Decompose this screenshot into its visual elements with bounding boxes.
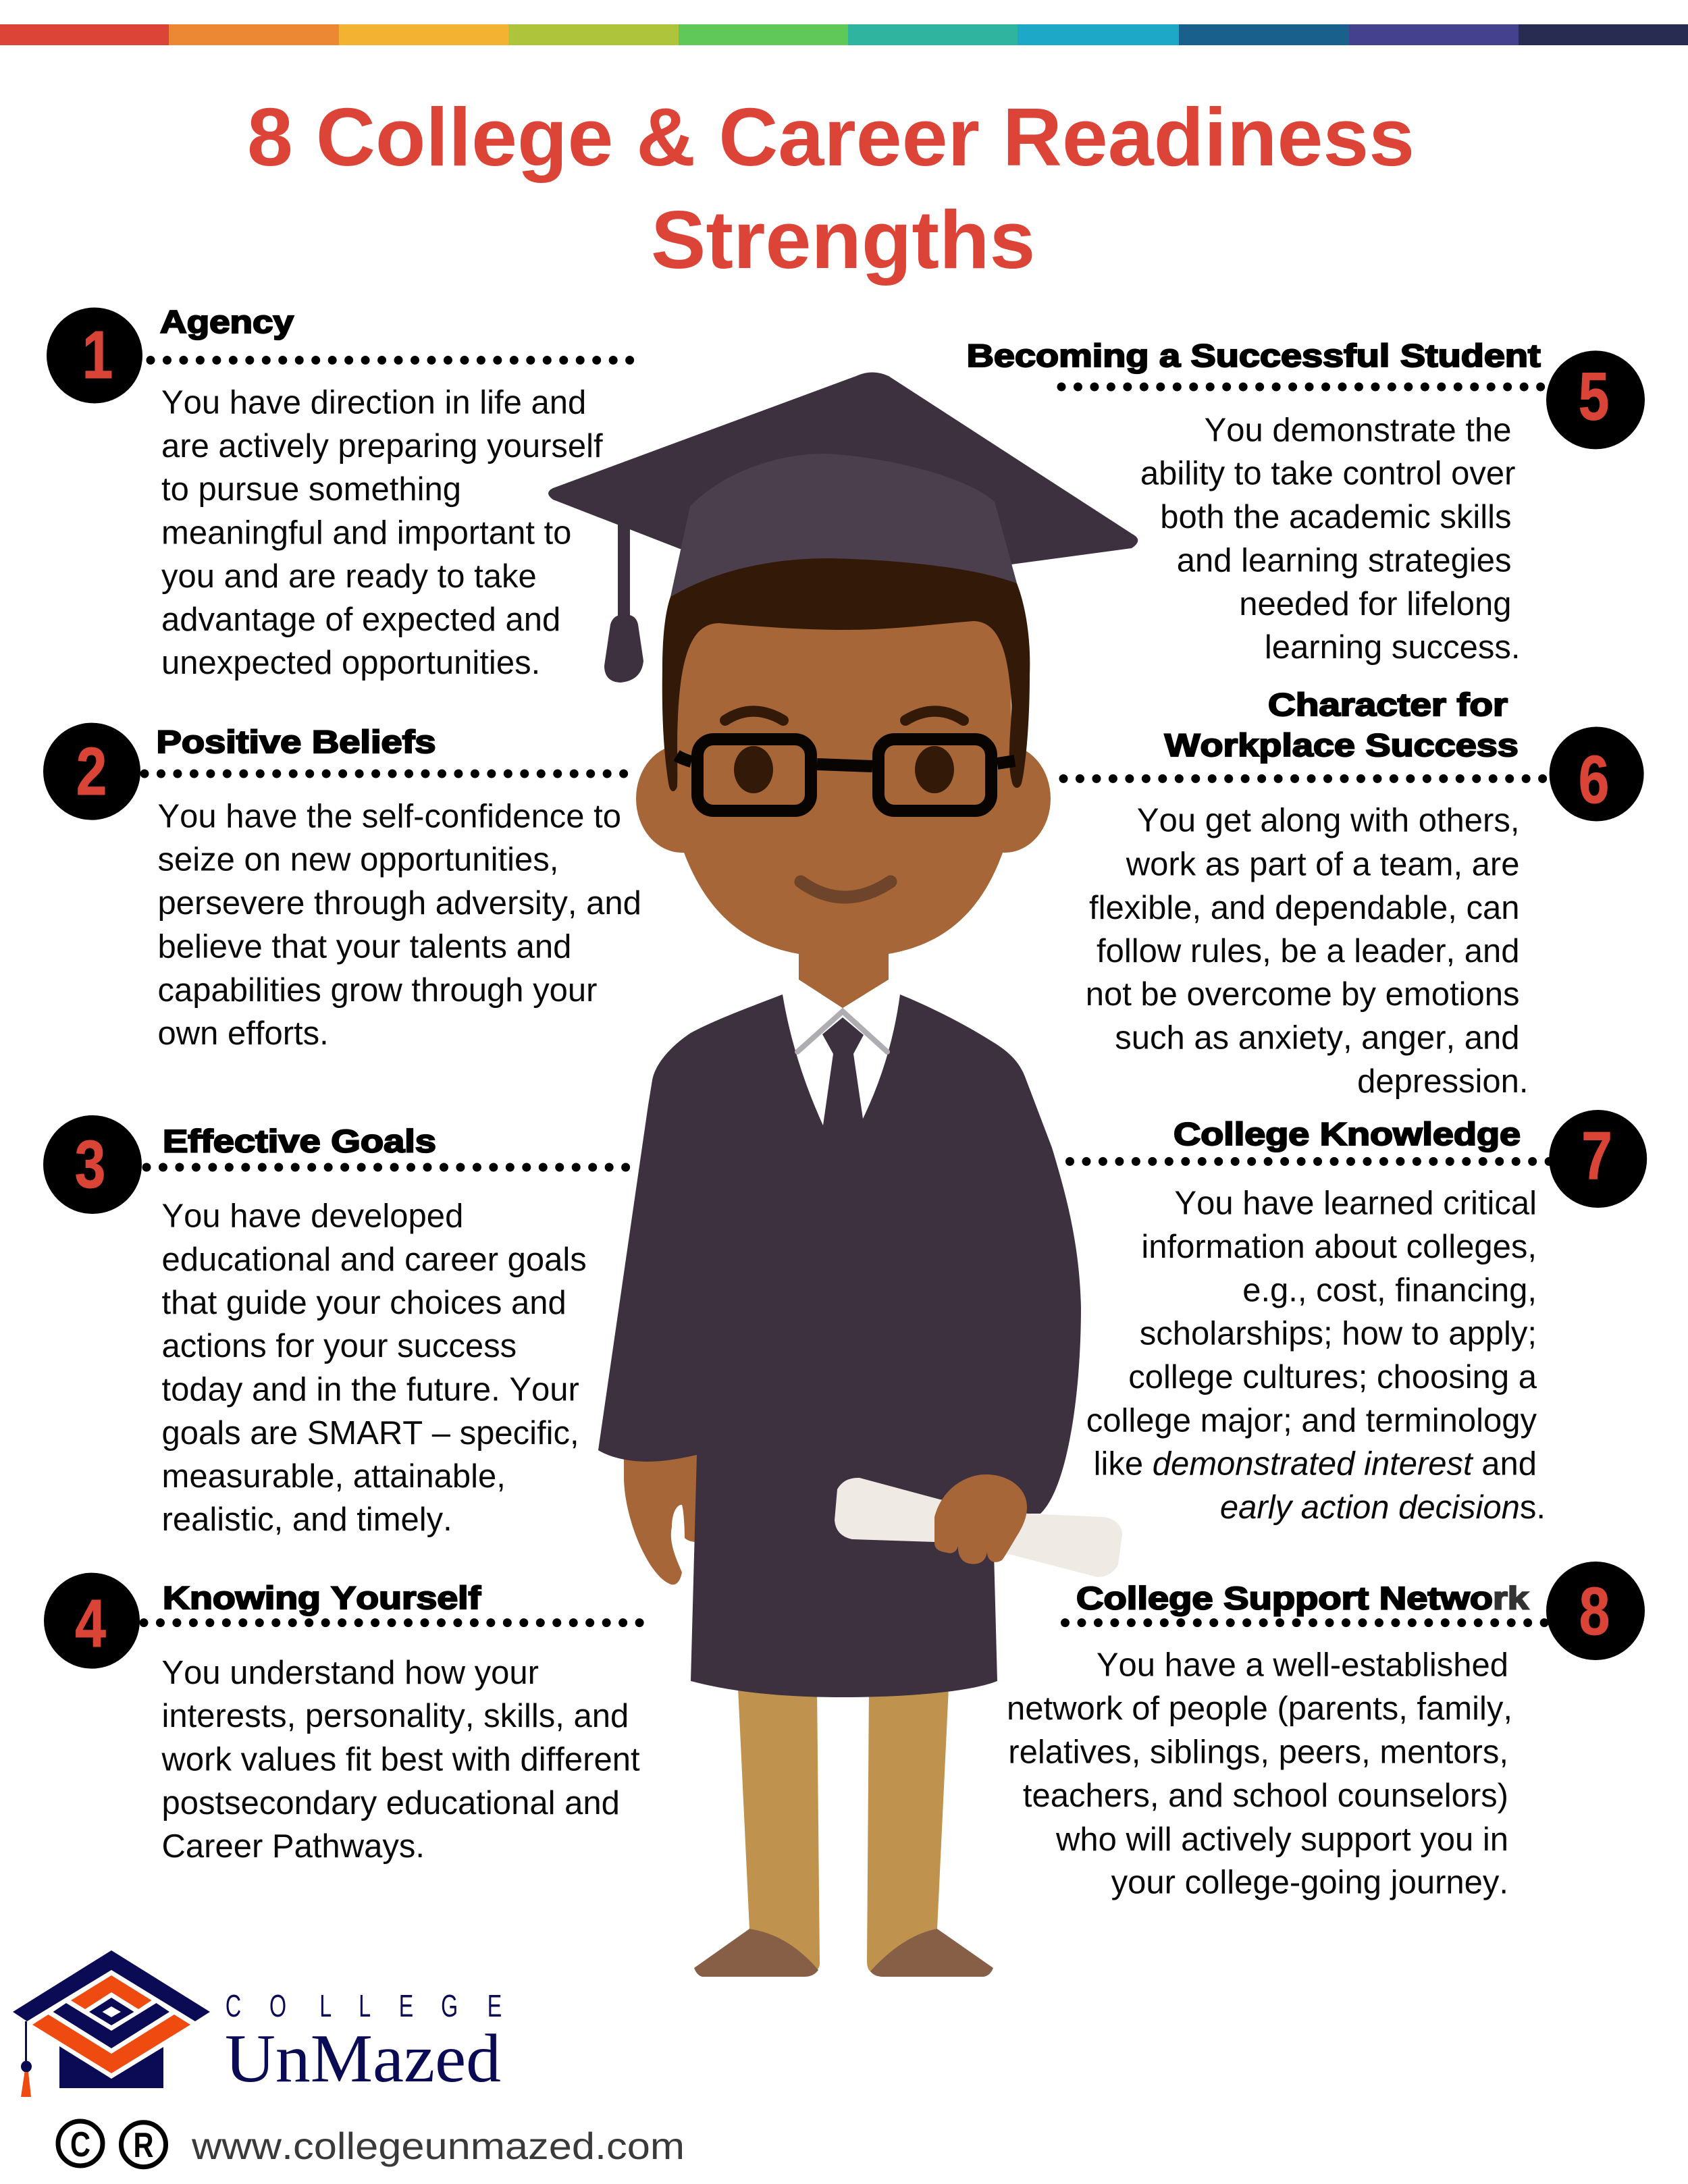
text: Becoming a Successful Student description: both the academic skills <box>1160 499 1511 535</box>
logo wordmark: UnMazed: UnMazed <box>225 2021 501 2097</box>
heading: College Support Network: College Support Netwo rk <box>1076 1580 1529 1616</box>
text: Positive Beliefs description <box>158 798 641 1052</box>
icon: cap band <box>670 454 1017 597</box>
copyright symbol: C <box>70 2125 90 2164</box>
text: Positive Beliefs description: seize on new opportunities, <box>158 841 558 878</box>
text: Positive Beliefs description: own efforts. <box>158 1015 329 1052</box>
text: College Support Network description: teachers, and school counselors) <box>1023 1778 1508 1814</box>
number badge 5 <box>1546 350 1645 449</box>
panel: strength 4 <box>44 1573 640 1865</box>
icon: shirt collar <box>783 980 900 1125</box>
text: Becoming a Successful Student description <box>1140 412 1521 666</box>
panel: strength 8 <box>1007 1562 1645 1901</box>
text: Effective Goals description <box>162 1198 587 1538</box>
text: Knowing Yourself description <box>161 1655 640 1865</box>
text: Character for Workplace Success description: such as anxiety, anger, and <box>1115 1019 1519 1056</box>
text: Positive Beliefs description: believe that your talents and <box>158 929 571 965</box>
text: Effective Goals description: today and in the future. Your <box>162 1372 579 1408</box>
number badge 8: 8 <box>1579 1574 1610 1649</box>
number badge 6: 6 <box>1579 742 1609 818</box>
copyright symbol <box>58 2121 103 2166</box>
text: Agency description: to pursue something <box>161 471 461 508</box>
icon: diploma scroll <box>835 1478 1122 1577</box>
text: Character for Workplace Success description: follow rules, be a leader, and <box>1097 933 1519 969</box>
heading: Character for Workplace Success <box>1165 687 1519 763</box>
text: Knowing Yourself description: postsecondary educational and <box>162 1785 620 1821</box>
text: Agency description: advantage of expected and <box>161 602 560 638</box>
heading: Positive Beliefs: Positive Beliefs <box>157 724 436 760</box>
text: College Support Network description <box>1007 1647 1512 1901</box>
text: Positive Beliefs description: You have the self-confidence to <box>158 798 621 834</box>
title <box>247 91 1415 286</box>
text: College Support Network description: your college-going journey. <box>1111 1865 1508 1901</box>
text: Agency description: meaningful and important to <box>161 514 571 551</box>
text: Becoming a Successful Student description: ability to take control over <box>1140 455 1515 491</box>
text: College Knowledge description: early action decisions. <box>1220 1489 1546 1526</box>
text: Character for Workplace Success description: work as part of a team, are <box>1126 847 1519 883</box>
number badge 2: 2 <box>76 734 107 809</box>
registered symbol: R <box>133 2125 154 2164</box>
text: Effective Goals description: realistic, and timely. <box>162 1501 452 1538</box>
number badge 4: 4 <box>75 1586 106 1661</box>
number badge 1: 1 <box>82 317 113 393</box>
logo wordmark: COLLEGE: COLLEGE <box>226 1989 502 2023</box>
title: Strengths <box>651 194 1035 286</box>
text: Agency description: unexpected opportunities. <box>161 645 540 681</box>
heading: Becoming a Successful Student: Becoming a Successful Student <box>967 338 1541 373</box>
text: Character for Workplace Success description: flexible, and dependable, can <box>1089 890 1519 926</box>
text: Becoming a Successful Student description: learning success. <box>1265 629 1521 666</box>
text: Knowing Yourself description: interests, personality, skills, and <box>162 1698 629 1734</box>
number badge 7: 7 <box>1581 1118 1612 1194</box>
text: Effective Goals description: actions for your success <box>162 1328 517 1364</box>
text: Knowing Yourself description: Career Pathways. <box>162 1828 425 1865</box>
number badge 2 <box>43 723 140 820</box>
text: College Knowledge description: college major; and terminology <box>1086 1403 1537 1439</box>
text: College Support Network description: relatives, siblings, peers, mentors, <box>1008 1734 1508 1770</box>
icon: right hand <box>934 1474 1027 1564</box>
icon: eyebrows <box>725 712 964 720</box>
website url: www.collegeunmazed.com <box>191 2125 685 2167</box>
text: College Knowledge description: scholarships; how to apply; <box>1140 1315 1537 1352</box>
number badge 3 <box>43 1115 142 1214</box>
text: Character for Workplace Success description: You get along with others, <box>1137 802 1519 838</box>
icon: tassel <box>604 520 643 683</box>
text: Effective Goals description: that guide your choices and <box>162 1285 566 1321</box>
College UnMazed logo <box>13 1950 502 2097</box>
icon: logo mark <box>13 1950 210 2097</box>
icon: glasses <box>677 739 1015 811</box>
text: Positive Beliefs description: persevere through adversity, and <box>158 885 641 922</box>
registered symbol <box>122 2123 166 2167</box>
text: Character for Workplace Success description: depression. <box>1357 1063 1529 1100</box>
text: Becoming a Successful Student description: needed for lifelong <box>1239 586 1511 622</box>
text: Effective Goals description: educational and career goals <box>162 1242 587 1278</box>
text: Effective Goals description: measurable, attainable, <box>162 1458 506 1495</box>
text: College Knowledge description: information about colleges, <box>1141 1229 1537 1265</box>
icon: hair <box>662 558 1030 791</box>
heading: Character for Workplace Success: Workplace Success <box>1165 727 1519 763</box>
panel: strength 6 <box>1086 687 1644 1100</box>
text: Effective Goals description: You have developed <box>162 1198 463 1234</box>
number badge 7 <box>1549 1110 1647 1208</box>
heading: College Knowledge: College Knowledge <box>1173 1116 1521 1152</box>
text: College Support Network description: network of people (parents, family, <box>1007 1690 1512 1727</box>
panel: strength 7 <box>1086 1110 1647 1526</box>
text: Effective Goals description: goals are SMART – specific, <box>162 1415 579 1451</box>
panel: strength 2 <box>43 723 641 1052</box>
heading: Effective Goals: Effective Goals <box>163 1123 436 1158</box>
graduate figure <box>548 373 1138 1977</box>
heading: Knowing Yourself: Knowing Yourself <box>163 1580 481 1616</box>
heading: Character for Workplace Success: Character for <box>1268 687 1508 722</box>
text: College Knowledge description: like demonstrated interest and <box>1094 1446 1537 1483</box>
number badge 8 <box>1546 1562 1645 1660</box>
icon: shoes <box>694 1929 993 1977</box>
text: College Knowledge description: You have learned critical <box>1174 1186 1537 1222</box>
text: College Support Network description: You have a well-established <box>1097 1647 1508 1684</box>
text: College Support Network description: who will actively support you in <box>1055 1821 1508 1858</box>
text: Knowing Yourself description: work values fit best with different <box>161 1742 640 1778</box>
number badge 5: 5 <box>1579 359 1609 434</box>
text: Agency description: You have direction in life and <box>161 385 586 421</box>
icon: gown <box>598 994 1081 1697</box>
text: College Knowledge description: college cultures; choosing a <box>1128 1359 1537 1395</box>
text: Knowing Yourself description: You understand how your <box>162 1655 539 1691</box>
icon: smile <box>801 882 891 897</box>
colour stripe bar <box>0 24 1688 45</box>
text: Agency description <box>161 385 603 681</box>
text: Agency description: are actively preparing yourself <box>161 428 603 464</box>
number badge 1 <box>47 308 142 404</box>
text: Becoming a Successful Student description: and learning strategies <box>1177 543 1511 579</box>
text: Becoming a Successful Student description: You demonstrate the <box>1205 412 1511 448</box>
number badge 3: 3 <box>75 1127 105 1202</box>
heading: Agency: Agency <box>160 304 294 340</box>
text: Positive Beliefs description: capabilities grow through your <box>158 972 597 1009</box>
title: 8 College & Career Readiness <box>247 91 1415 183</box>
icon: left hand <box>624 1451 700 1584</box>
icon: head and ears <box>636 618 1051 1008</box>
text: College Knowledge description: e.g., cost, financing, <box>1242 1272 1537 1308</box>
text: Character for Workplace Success description <box>1086 802 1529 1100</box>
panel: strength 1 <box>47 304 603 681</box>
icon: mortarboard <box>548 373 1138 564</box>
number badge 4 <box>44 1573 140 1669</box>
dotted leader lines <box>144 361 1552 1623</box>
icon: trousers <box>738 1688 949 1973</box>
icon: eyes <box>734 746 954 793</box>
text: Character for Workplace Success description: not be overcome by emotions <box>1086 976 1519 1013</box>
text: College Knowledge description <box>1086 1186 1546 1526</box>
number badge 6 <box>1550 726 1644 821</box>
text: Agency description: you and are ready to take <box>161 558 537 595</box>
panel: strength 3 <box>43 1115 587 1538</box>
panel: strength 5 <box>967 338 1645 666</box>
